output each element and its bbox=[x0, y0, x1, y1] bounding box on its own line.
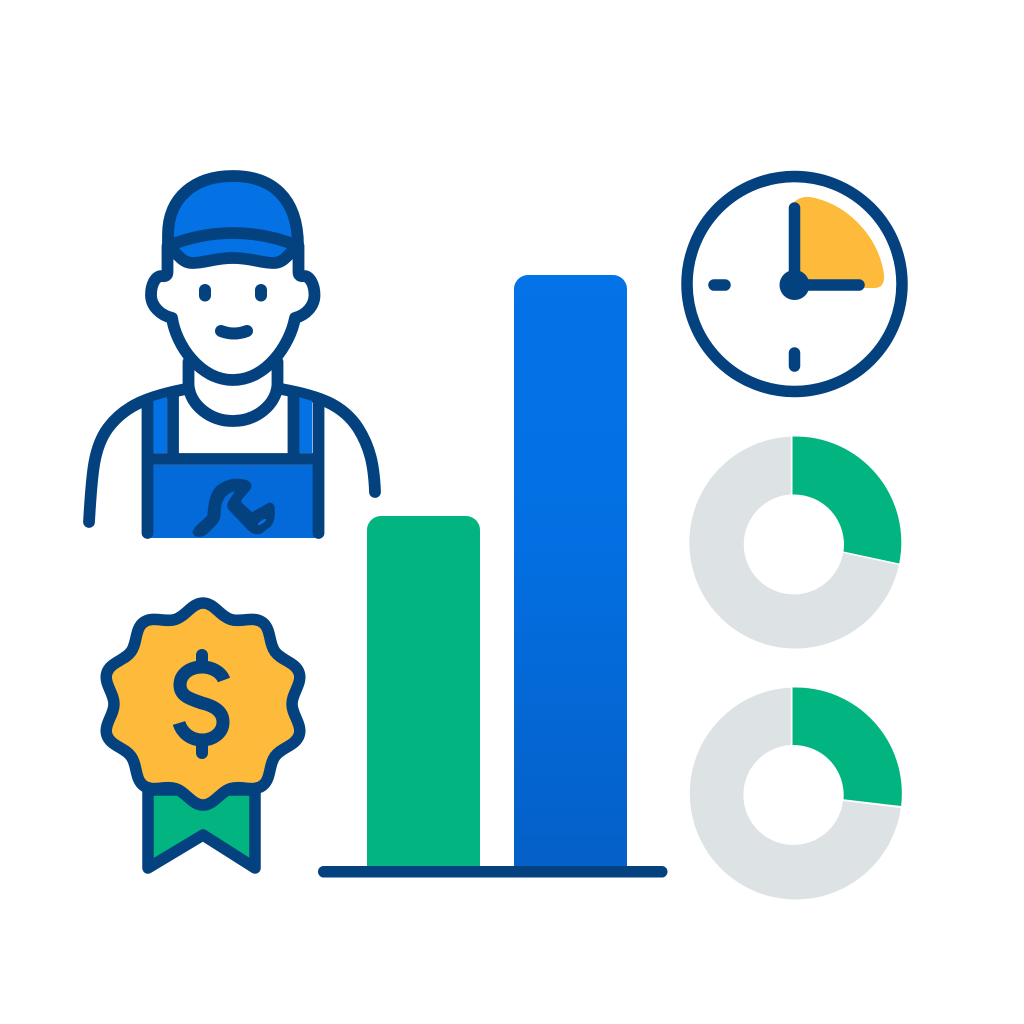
lower donut segment bbox=[792, 687, 902, 806]
clock face bbox=[687, 176, 902, 392]
rosette bbox=[106, 603, 300, 805]
icon: clock bbox=[687, 176, 902, 392]
dollar sign bbox=[179, 655, 224, 753]
overalls bib bbox=[148, 465, 318, 538]
ribbon bbox=[148, 790, 255, 868]
wrench emblem bbox=[193, 479, 274, 536]
clock hands and ticks bbox=[714, 208, 859, 366]
right eye bbox=[255, 290, 267, 296]
clock highlighted quarter bbox=[793, 197, 884, 288]
worker cap bbox=[168, 176, 298, 263]
neck and collar bbox=[188, 362, 278, 421]
cap peak line bbox=[168, 233, 298, 246]
blue bar bbox=[514, 275, 627, 866]
left overall strap bbox=[153, 397, 167, 453]
clock hub bbox=[780, 270, 810, 300]
icon: dollar rosette badge bbox=[106, 603, 300, 868]
lower donut remainder bbox=[690, 688, 901, 899]
left shoulder and arm bbox=[89, 389, 186, 522]
right overall strap bbox=[299, 397, 312, 453]
donut chart: lower bbox=[690, 687, 902, 899]
overall outlines bbox=[148, 394, 318, 533]
green bar bbox=[367, 516, 480, 866]
left eye bbox=[199, 290, 211, 296]
upper donut segment bbox=[792, 436, 901, 564]
bar chart bbox=[318, 275, 668, 878]
icon: worker bbox=[89, 176, 375, 538]
baseline bbox=[318, 866, 668, 878]
worker head and ears bbox=[151, 246, 314, 380]
donut chart: upper bbox=[689, 436, 901, 648]
mouth bbox=[221, 331, 247, 334]
right shoulder and arm bbox=[281, 389, 375, 492]
upper donut remainder bbox=[689, 437, 899, 648]
